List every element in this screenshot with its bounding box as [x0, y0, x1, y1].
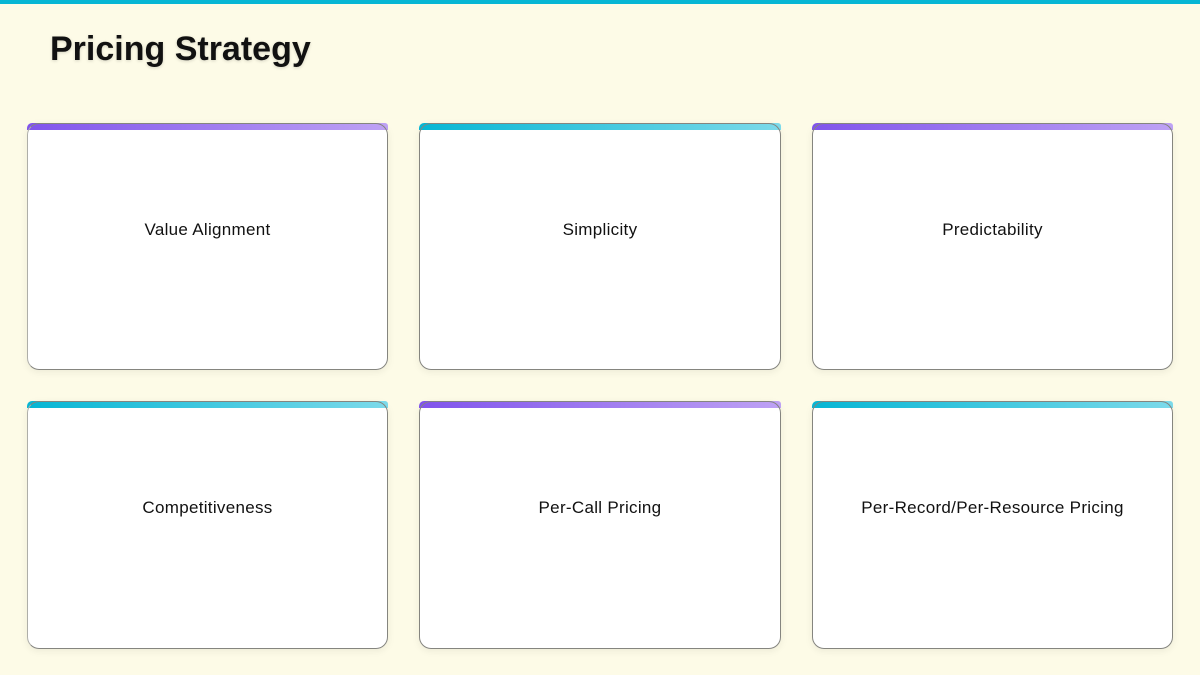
label: Per-Record/Per-Resource Pricing: Per-Record/Per-Resource Pricing [861, 498, 1124, 517]
label: Simplicity: Simplicity [563, 220, 637, 239]
label: Per-Call Pricing: Per-Call Pricing [539, 498, 661, 517]
top accent bar [0, 0, 1200, 4]
label: Value Alignment: Value Alignment [144, 220, 271, 239]
title: Pricing Strategy [50, 30, 311, 68]
panel: Competitiveness [27, 401, 388, 651]
label: Competitiveness: Competitiveness [142, 498, 273, 517]
panel: Value Alignment [27, 123, 388, 372]
panel: Simplicity [419, 123, 781, 372]
panel: Predictability [812, 123, 1173, 372]
panel: Per-Record/Per-Resource Pricing [812, 401, 1173, 651]
label: Predictability: Predictability [942, 220, 1043, 239]
panel: Per-Call Pricing [419, 401, 781, 651]
